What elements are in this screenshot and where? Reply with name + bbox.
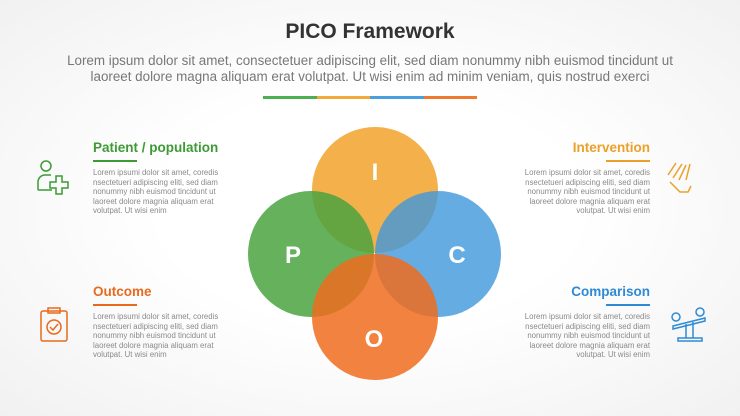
panel: comparison	[525, 284, 650, 359]
panel: patient	[93, 140, 218, 215]
subtitle: laoreet dolore magna aliquam erat volutpat. Ut wisi enim ad minim veniam, quis nostrud exerci	[91, 69, 649, 84]
panel: patient: Lorem ipsumi dolor sit amet, coredis nsectetueri adipiscing eliti, sed diam nonummy nibh euismod tincidunt ut laoreet dolore magnia aliquam erat volutpat. Ut wisi enim	[93, 168, 218, 215]
icon: outcome clipboard	[41, 308, 67, 341]
subtitle	[67, 53, 673, 84]
title: PICO Framework	[285, 20, 455, 43]
venn diagram: I	[372, 159, 378, 186]
panel: outcome: Lorem ipsumi dolor sit amet, coredis nsectetueri adipiscing eliti, sed diam nonummy nibh euismod tincidunt ut laoreet dolore magnia aliquam erat volutpat. Ut wisi enim	[93, 312, 218, 359]
icon: patient	[38, 161, 68, 194]
circle I	[312, 127, 438, 253]
panel: outcome	[93, 284, 218, 359]
venn diagram: P	[285, 242, 301, 269]
panel: comparison: Comparison	[571, 284, 650, 299]
circle O	[312, 254, 438, 380]
panel: comparison: Lorem ipsumi dolor sit amet, coredis nsectetueri adipiscing eliti, sed diam nonummy nibh euismod tincidunt ut laoreet dolore magnia aliquam erat volutpat. Ut wisi enim	[525, 312, 650, 359]
panel: outcome: Outcome	[93, 284, 152, 299]
venn diagram: O	[365, 326, 383, 353]
panel: intervention: Intervention	[573, 140, 650, 155]
panel: intervention	[525, 140, 650, 215]
subtitle: Lorem ipsum dolor sit amet, consectetuer adipiscing elit, sed diam nonummy nibh euismod tincidunt ut	[67, 53, 673, 68]
panel: patient: Patient / population	[93, 140, 218, 155]
color bar	[263, 96, 477, 99]
circle C	[375, 191, 501, 317]
venn diagram: C	[448, 242, 466, 269]
icon: intervention hand	[668, 163, 691, 192]
icon: comparison scale	[672, 308, 705, 341]
circle P	[248, 191, 374, 317]
panel: intervention: Lorem ipsumi dolor sit amet, coredis nsectetueri adipiscing eliti, sed diam nonummy nibh euismod tincidunt ut laoreet dolore magnia aliquam erat volutpat. Ut wisi enim	[525, 168, 650, 215]
